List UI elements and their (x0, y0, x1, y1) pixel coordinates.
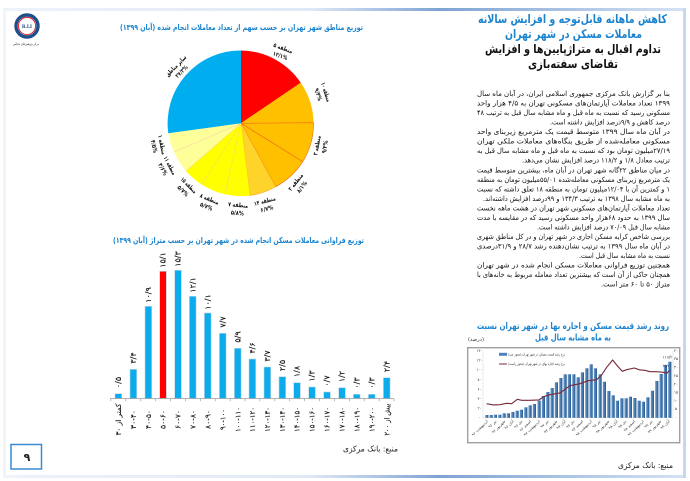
report title: معاملات مسکن در شهر تهران (505, 27, 642, 41)
left axis labels: ۱۰۰ (476, 367, 483, 372)
bar category labels: ۴۰-۵۰ (144, 410, 153, 429)
pie label: other districts: ۲۷/۳% (174, 64, 190, 80)
month labels: دی ۹۶ (513, 418, 524, 429)
pie label: district 7 (227, 201, 249, 218)
pie label: other districts (164, 54, 194, 84)
bar category labels: ۱۲۰-۱۳۰ (263, 407, 272, 432)
bar value labels: ۰/۷ (323, 375, 332, 387)
month labels: آبان ۹۸ (607, 418, 619, 430)
report title: تقاضای سفته‌بازی (528, 57, 618, 71)
left axis labels: ۱۴۰ (476, 348, 483, 353)
left axis labels: ۰ (478, 415, 481, 420)
body text: تعداد معاملات آپارتمان‌های مسکونی شهر تهران در هشت ماهه نخست (477, 203, 670, 212)
month labels: آبان ۹۹ (659, 418, 671, 430)
right axis labels: ۵ (675, 406, 677, 411)
right axis labels: ۱۵ (674, 390, 678, 394)
body text: نسبت به ماه مشابه سال قبل است. (579, 252, 670, 260)
month labels: اردیبهشت ۹۷ (522, 419, 541, 437)
body text: در میان مناطق ۲۲گانه شهر تهران در آبان ماه، بیشترین متوسط قیمت (477, 165, 670, 174)
bar value labels: ۱/۸ (293, 365, 302, 377)
bar category labels: ۹۰-۱۰۰ (218, 409, 227, 430)
right axis labels: ۴۰ (674, 348, 678, 353)
month labels: شهریور ۹۸ (594, 419, 610, 434)
month labels: تیر ۹۷ (539, 419, 549, 429)
month labels: شهریور ۹۶ (490, 419, 506, 434)
pie label: district 14: منطقه ۱۴ (253, 195, 277, 208)
bar category labels: ۵۰-۶۰ (159, 410, 168, 429)
report title (478, 12, 667, 71)
body text: در آبان ماه سال ۱۳۹۹ به ترتیب نشان‌دهنده رشد ۲۸/۷ و ۳۱/۹درصدی (477, 242, 670, 251)
pie label: district 1 (148, 134, 167, 157)
pie label: district 2: منطقه ۲ (287, 172, 305, 192)
bar value labels: ۵/۹ (233, 331, 242, 343)
right axis labels: ۳۰ (674, 364, 678, 370)
page number box (11, 444, 42, 469)
bar value labels: ۲/۵ (278, 360, 287, 371)
bar chart title: توزیع فراوانی معاملات مسکن انجام شده در شهر تهران بر حسب متراژ (آبان ۱۳۹۹) (113, 235, 364, 245)
month labels: تیر ۹۶ (487, 419, 497, 429)
bar value labels: ۳/۴ (129, 352, 138, 364)
bar value labels: ۱۰/۱ (203, 294, 212, 310)
body text: مسکونی رسید که نسبت به ماه قبل و ماه مشابه سال قبل به ترتیب ۴۸ (477, 109, 670, 117)
pie label: district 10 (311, 82, 332, 105)
body text: درصد کاهش و ۹/۹درصد افزایش داشته است. (550, 119, 670, 127)
month labels: اسفند ۹۶ (518, 419, 532, 433)
bar category labels: کمتر از ۳۰ (114, 403, 123, 436)
logo: R.I.I emblem: R.I.I (22, 25, 32, 30)
body text: ترتیب معادل ۱/۸ و ۱۱۸/۲ درصد افزایش نشان می‌دهد. (522, 157, 670, 165)
source: trend chart: منبع: بانک مرکزی (618, 461, 673, 470)
bar value labels: ۱/۳ (308, 370, 317, 382)
bar category labels: ۱۵۰-۱۶۰ (308, 407, 317, 432)
right axis labels: ۲۵ (674, 373, 678, 378)
pie label: district 8: ۵/۷% (199, 201, 214, 213)
logo: R.I.I emblem: مرکز پژوهش‌های مجلس (13, 42, 39, 46)
legend: نرخ رشد قیمت مسکن در شهر تهران (محور چپ) (508, 352, 565, 356)
pie label: district 14 (253, 195, 279, 215)
left axis labels: ۶۰ (477, 386, 482, 392)
pie label: district 15: ۵/۷% (176, 184, 190, 198)
pie label: district 15 (173, 176, 198, 201)
body text: ۲۷/۱۹میلیون تومان بود که نسبت به ماه قبل و ماه مشابه سال قبل به (477, 147, 670, 155)
month labels: دی ۹۸ (617, 418, 628, 429)
pie chart title: توزیع مناطق شهر تهران بر حسب سهم از تعداد معاملات انجام شده (آبان ۱۳۹۹) (120, 22, 363, 32)
pie label: district 3: منطقه ۳ (312, 135, 323, 156)
month labels (470, 418, 671, 437)
logo: R.I.I emblem (13, 15, 39, 46)
pie label: district 1: منطقه ۱ (156, 134, 167, 156)
body text: یک مترمربع زیربنای مسکونی معامله‌شده ۵۵/۰۱میلیون تومان به منطقه (477, 176, 670, 184)
bar value labels: ۲/۴ (382, 361, 391, 372)
body text: بنا بر گزارش بانک مرکزی جمهوری اسلامی ایران، در آبان ماه سال (477, 89, 670, 98)
body text: همچنین توزیع فراوانی معاملات مسکن انجام شده در شهر تهران (477, 262, 670, 270)
month labels: تیر ۹۸ (591, 419, 601, 429)
month labels: اسفند ۹۷ (570, 419, 584, 433)
pie label: district 11: ۴/۶% (156, 162, 169, 177)
pie label: district 14: ۶/۷% (260, 204, 274, 214)
rent growth line (487, 360, 670, 405)
body text: مسکونی معامله‌شده از طریق بنگاه‌های معاملات ملکی تهران (477, 137, 670, 146)
data labels (663, 354, 672, 368)
month labels: شهریور ۹۷ (542, 419, 558, 434)
bar category labels: ۱۹۰-۲۰۰ (367, 407, 376, 432)
bar value labels: ۱۵/۱ (159, 252, 168, 268)
bar category labels: ۱۶۰-۱۷۰ (323, 407, 332, 432)
bar category labels: ۱۱۰-۱۲۰ (248, 407, 257, 432)
pie chart: share of transactions by district (148, 42, 332, 218)
bar category labels: ۱۰۰-۱۱۰ (233, 407, 242, 432)
bar category labels: ۱۳۰-۱۴۰ (278, 407, 287, 432)
pie label: district 15: منطقه ۱۵ (179, 176, 198, 195)
month labels: آبان ۹۷ (555, 418, 567, 430)
pie label: district 3: ۹/۳% (321, 140, 330, 154)
pie label: district 11: منطقه ۱۱ (162, 155, 177, 176)
bar category labels: ۳۰-۴۰ (129, 410, 138, 429)
left axis labels: ۴۰ (477, 396, 482, 401)
data labels: ۱۱۸/۲ (663, 354, 672, 359)
body text: سال ۱۳۹۹ به حدود ۶۸هزار واحد مسکونی رسید که در مقایسه با مدت (477, 214, 670, 222)
bar value labels: ۳/۷ (263, 350, 272, 362)
trend chart: housing price and rent growth (468, 348, 680, 443)
pie label: district 10: ۹/۴% (312, 87, 323, 102)
bar category labels: ۱۷۰-۱۸۰ (338, 407, 347, 432)
pie label: district 11 (155, 155, 177, 180)
pie label: district 7: ۵/۸% (231, 209, 244, 218)
month labels: آبان ۹۶ (503, 418, 515, 430)
body text: در آبان ماه سال ۱۳۹۹ متوسط قیمت یک مترمربع زیربنای واحد (477, 127, 670, 136)
page number box: ۹ (24, 451, 31, 464)
bar value labels: ۰/۳ (352, 377, 361, 389)
left axis labels: ۸۰ (477, 377, 482, 382)
left axis labels: ۲۰ (477, 406, 482, 410)
month labels: شهریور ۹۹ (646, 419, 662, 434)
trend chart unit label: (درصد) (468, 337, 484, 343)
body text (477, 89, 670, 289)
bar category labels (114, 403, 391, 436)
trend chart title (477, 322, 669, 344)
trend chart title: به ماه مشابه سال قبل (535, 334, 611, 344)
month labels: اسفند ۹۸ (622, 419, 636, 433)
bar value labels: ۴/۶ (248, 342, 257, 354)
bar value labels: ۱۲/۱ (188, 277, 197, 293)
bars (115, 270, 390, 398)
right axis labels: ۳۵ (674, 356, 678, 361)
right axis labels: ۰ (675, 415, 677, 420)
pie label: district 8 (196, 193, 220, 214)
bar value labels: ۱۰/۹ (144, 287, 153, 303)
pie label: district 2 (287, 172, 311, 197)
body text: همچنان حاکی از آن است که بیشترین تعداد معامله مربوط به خانه‌های با (477, 270, 670, 279)
bar value labels: ۰/۵ (114, 377, 123, 388)
pie label: district 5: ۱۲/۱% (272, 50, 288, 62)
bar value labels: ۱۵/۳ (174, 251, 183, 267)
month labels: تیر ۹۹ (643, 419, 653, 429)
data labels: ۲۸/۷ (663, 364, 670, 368)
pie label: district 2: ۸/۱% (296, 180, 309, 195)
month labels: دی ۹۷ (565, 418, 576, 429)
price growth bars (485, 362, 671, 418)
pie label: district 8: منطقه ۸ (199, 193, 220, 207)
bar chart: transactions by floor area (110, 251, 394, 436)
bar category labels: ۸۰-۹۰ (203, 410, 212, 429)
bar value labels: ۱/۲ (338, 371, 347, 382)
pie label: district 1: ۴/۵% (149, 139, 158, 154)
pie label: district 5 (270, 42, 294, 63)
month labels: اردیبهشت ۹۸ (574, 419, 593, 437)
body text: بررسی شاخص کرایه مسکن اجاری در شهر تهران و در کل مناطق شهری (477, 233, 670, 241)
bar value labels: ۷/۷ (218, 316, 227, 328)
bar category labels: ۱۴۰-۱۵۰ (293, 407, 302, 432)
month labels: اردیبهشت ۹۶ (470, 419, 489, 437)
bar value labels: ۰/۳ (367, 377, 376, 389)
pie label: district 5: منطقه ۵ (272, 42, 294, 55)
left axis labels: ۱۲۰ (476, 358, 483, 362)
legend (499, 352, 565, 366)
legend: نرخ رشد اجاره بهای در شهر تهران (محور راست) (508, 361, 565, 366)
bar category labels: بیش از ۲۰۰ (382, 404, 391, 436)
bar value labels (114, 251, 391, 389)
right axis labels: ۲۰ (674, 382, 678, 386)
body text: مشابه سال قبل ۷۰/۰۹ درصد افزایش داشته است. (537, 224, 670, 232)
pie label: district 10: منطقه ۱۰ (319, 82, 332, 103)
bar category labels: ۷۰-۸۰ (188, 410, 197, 429)
month labels: اردیبهشت ۹۹ (626, 419, 645, 437)
right axis labels: ۱۰ (674, 398, 678, 403)
body text: ۱ و کمترین آن با ۱۲/۰۴میلیون تومان به منطقه ۱۸ تعلق داشته که نسبت (477, 184, 670, 193)
body text: متراژ ۵۰ تا ۶۰ متر است. (601, 281, 670, 289)
body text: به ماه مشابه سال ۱۳۹۸ به ترتیب ۱۳۴/۳ و ۹۹درصد افزایش داشته‌اند. (483, 195, 670, 203)
pie label: district 7: منطقه ۷ (228, 201, 249, 210)
bar category labels: ۱۸۰-۱۹۰ (352, 407, 361, 432)
source: bar chart: منبع: بانک مرکزی (343, 444, 398, 454)
pie label: district 3 (312, 135, 331, 157)
bar category labels: ۶۰-۷۰ (174, 410, 183, 429)
left axis labels (476, 348, 483, 420)
pie label: other districts: سایر مناطق (164, 54, 188, 78)
body text: ۱۳۹۹ تعداد معاملات آپارتمان‌های مسکونی تهران به ۴/۵ هزار واحد (477, 98, 670, 108)
right axis labels (674, 348, 678, 420)
